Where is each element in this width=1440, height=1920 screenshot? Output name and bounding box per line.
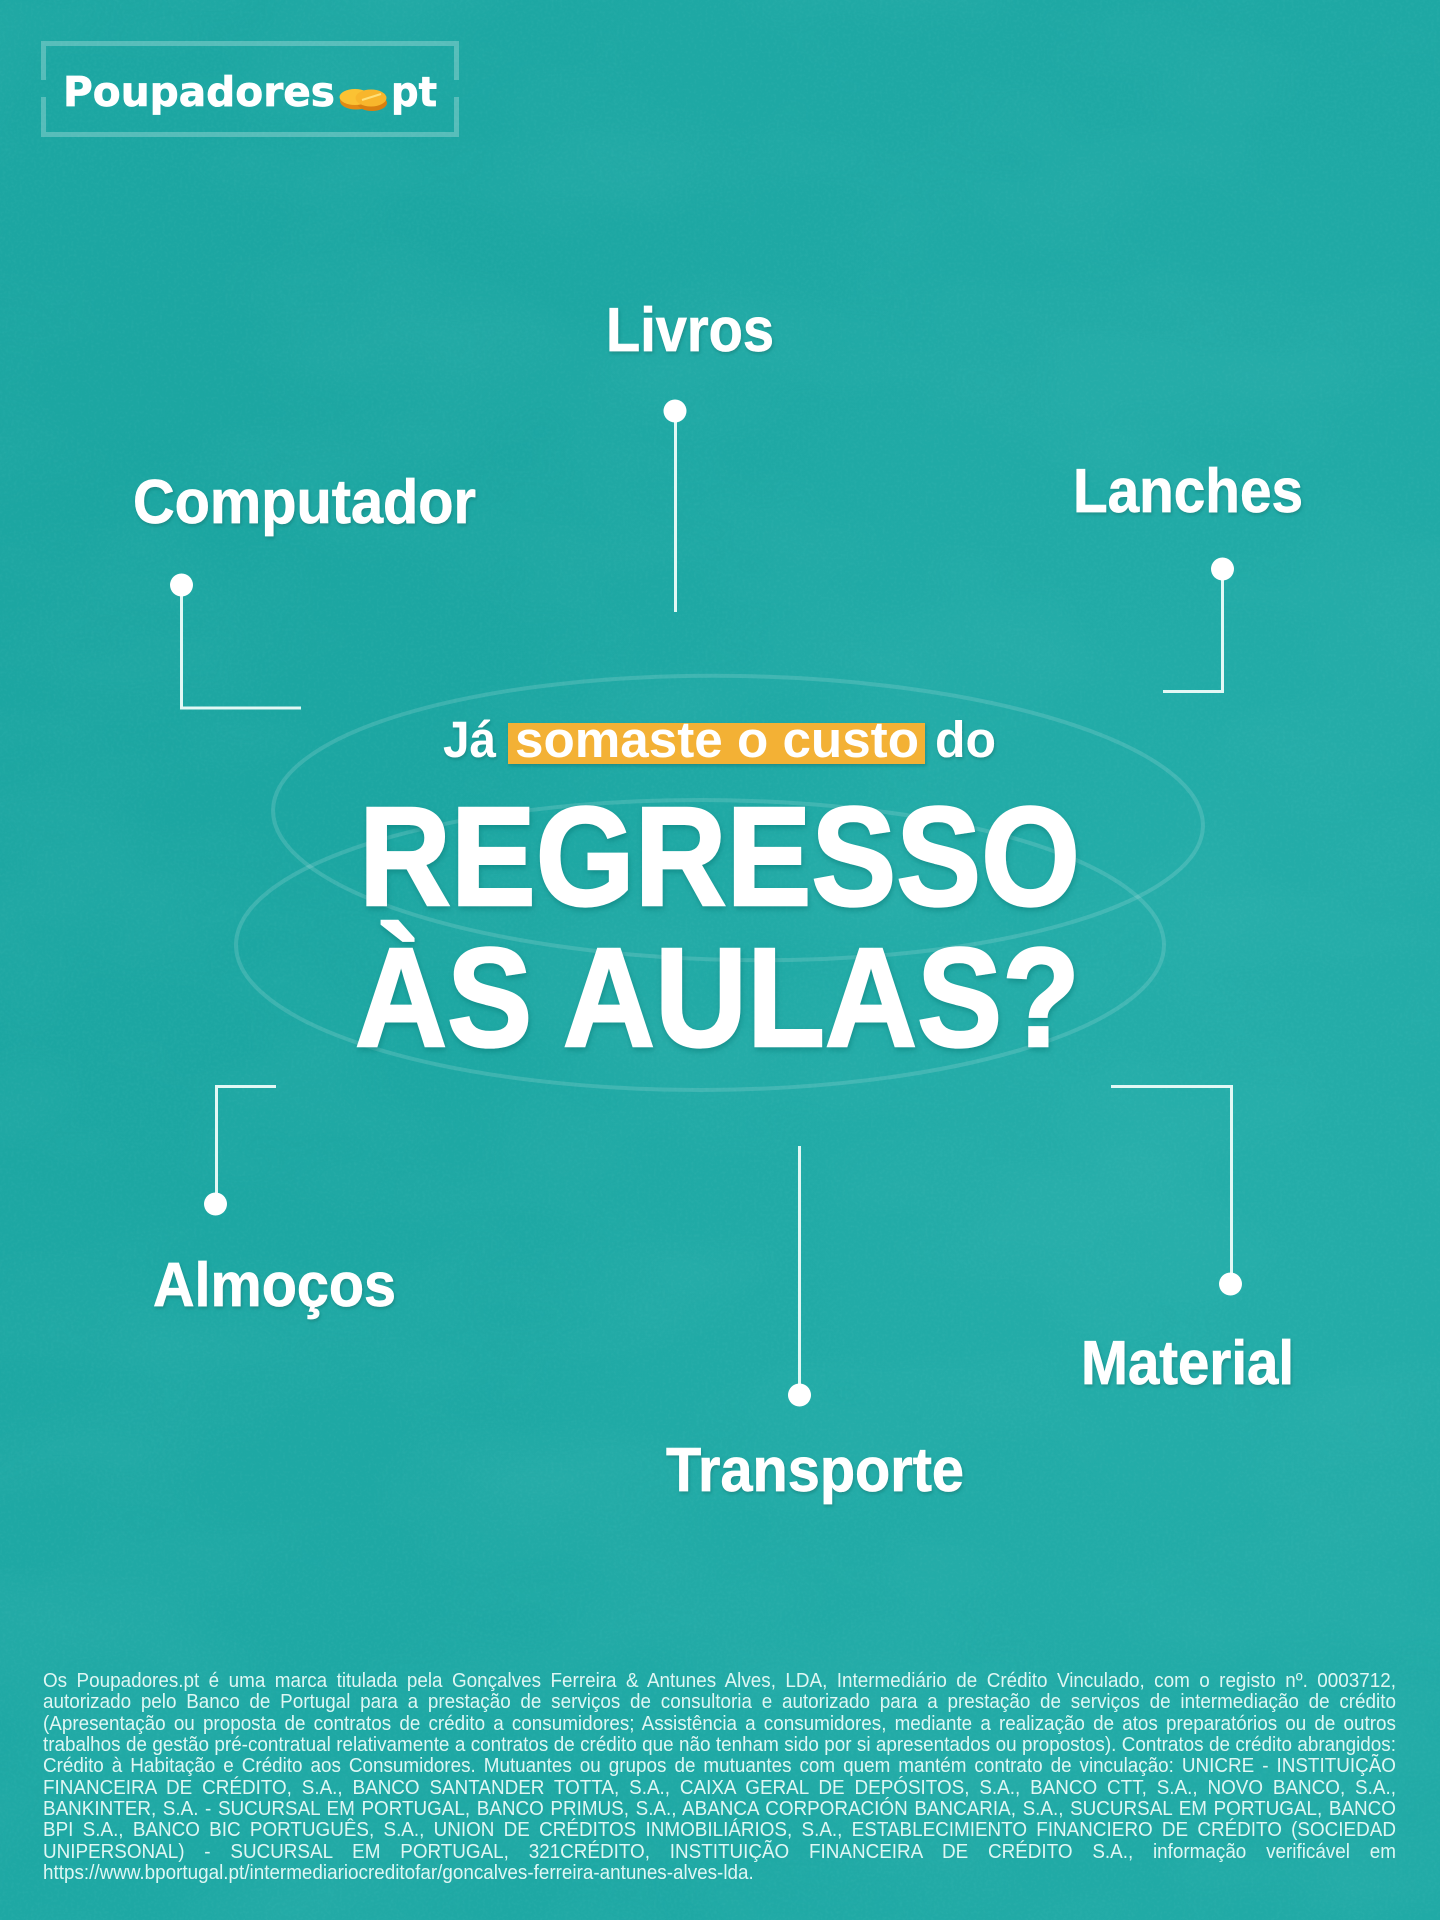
item: Almoços: Almoços bbox=[153, 1251, 396, 1320]
legal disclaimer text: (Apresentação ou proposta de contratos de crédito a consumidores; Assistência a consumidores, mediante a realização de atos preparatórios ou de outros bbox=[43, 1712, 1396, 1735]
icon: gold coins bbox=[340, 89, 387, 111]
legal disclaimer text: UNIPERSONAL) - SUCURSAL EM PORTUGAL, 321CRÉDITO, INSTITUIÇÃO FINANCEIRA DE CRÉDITO S.A., informação verificável em bbox=[43, 1840, 1396, 1863]
ellipse: lower decorative ring bbox=[236, 800, 1164, 1090]
item: Lanches bbox=[1073, 457, 1303, 692]
item: Material: Material bbox=[1081, 1329, 1294, 1398]
item: Computador bbox=[133, 468, 476, 708]
logo: Poupadores.pt bbox=[44, 44, 456, 134]
highlight: orange bar bbox=[508, 723, 925, 764]
ellipse: upper decorative ring bbox=[271, 668, 1205, 968]
title: REGRESSO ÀS AULAS?: REGRESSO bbox=[359, 777, 1080, 935]
dot: Material bbox=[1219, 1272, 1242, 1296]
legal disclaimer text: https://www.bportugal.pt/intermediariocreditofar/goncalves-ferreira-antunes-alves-lda. bbox=[43, 1861, 754, 1884]
connector: Material bbox=[1111, 1086, 1232, 1284]
legal disclaimer text: BANKINTER, S.A. - SUCURSAL EM PORTUGAL, BANCO PRIMUS, S.A., ABANCA CORPORACIÓN BANCARIA, S.A., SUCURSAL EM PORTUGAL, BANCO bbox=[43, 1797, 1396, 1820]
legal disclaimer text: trabalhos de gestão pré-contratual relativamente a contratos de crédito que não tenham sido por si apresentados ou propostos). Contratos de crédito abrangidos: bbox=[43, 1733, 1396, 1756]
title: REGRESSO ÀS AULAS? bbox=[355, 777, 1080, 1076]
connector: Almoços bbox=[216, 1086, 276, 1204]
logo: Poupadores.pt: Poupadores bbox=[63, 68, 335, 116]
legal disclaimer text: autorizado pelo Banco de Portugal para a prestação de serviços de consultoria e autorizado para a prestação de serviços de intermediação de crédito bbox=[43, 1690, 1396, 1713]
item: Lanches: Lanches bbox=[1073, 457, 1303, 526]
connector: Computador bbox=[182, 585, 301, 708]
item: Material bbox=[1081, 1086, 1294, 1398]
subtitle: Já somaste o custo do: somaste o custo bbox=[515, 711, 919, 768]
legal disclaimer text: FINANCEIRA DE CRÉDITO, S.A., BANCO SANTANDER TOTTA, S.A., CAIXA GERAL DE DEPÓSITOS, S.A., BANCO CTT, S.A., NOVO BANCO, S.A., bbox=[43, 1776, 1396, 1799]
subtitle: Já somaste o custo do: Já bbox=[443, 711, 497, 768]
legal disclaimer text: BPI S.A., BANCO BIC PORTUGUÊS, S.A., UNION DE CRÉDITOS INMOBILIÁRIOS, S.A., ESTABLECIMIENTO FINANCIERO DE CRÉDITO (SOCIEDAD bbox=[43, 1818, 1396, 1841]
connector: Livros bbox=[674, 411, 677, 612]
legal disclaimer text: Crédito à Habitação e Crédito aos Consumidores. Mutuantes ou grupos de mutuantes com quem mantém contrato de vinculação: UNICRE - INSTITUIÇÃO bbox=[43, 1754, 1396, 1777]
connector: Lanches bbox=[1163, 569, 1222, 692]
subtitle: Já somaste o custo do: do bbox=[935, 711, 996, 768]
dot: Livros bbox=[664, 400, 686, 422]
dot: Transporte bbox=[788, 1384, 811, 1406]
connector: Transporte bbox=[798, 1146, 801, 1395]
item: Livros: Livros bbox=[606, 296, 774, 365]
item: Transporte bbox=[666, 1146, 964, 1505]
dot: Computador bbox=[170, 574, 193, 596]
dot: Lanches bbox=[1211, 558, 1234, 580]
legal disclaimer text: Os Poupadores.pt é uma marca titulada pela Gonçalves Ferreira & Antunes Alves, LDA, Intermediário de Crédito Vinculado, com o registo nº. 0003712, bbox=[43, 1669, 1396, 1692]
item: Computador: Computador bbox=[133, 468, 476, 537]
item: Livros bbox=[606, 296, 774, 612]
legal disclaimer text bbox=[43, 1669, 1396, 1884]
item: Almoços bbox=[153, 1086, 396, 1320]
item: Transporte: Transporte bbox=[666, 1436, 964, 1505]
logo: Poupadores.pt: pt bbox=[391, 68, 437, 116]
title: REGRESSO ÀS AULAS?: ÀS AULAS? bbox=[355, 918, 1080, 1076]
dot: Almoços bbox=[204, 1192, 227, 1216]
